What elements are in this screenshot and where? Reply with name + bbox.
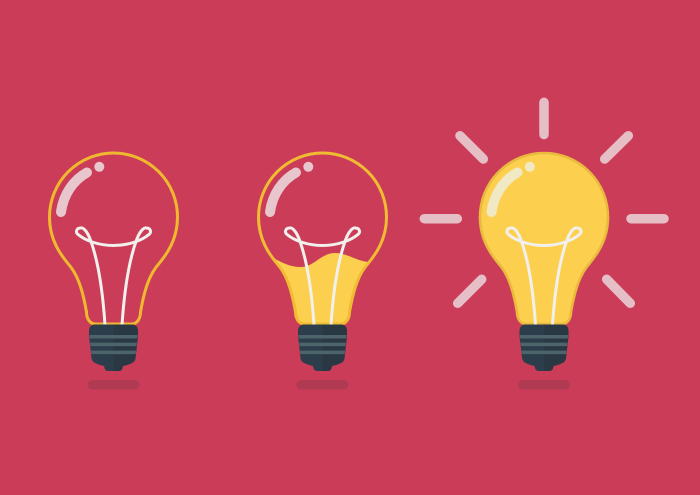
bulb 3 shadow <box>518 380 570 390</box>
bulb 3 glass <box>480 153 608 324</box>
light rays <box>424 102 664 303</box>
bulb 1 filament <box>76 228 150 325</box>
bulb 1 highlight <box>61 162 104 212</box>
bulb 3: fully lit <box>480 153 608 390</box>
bulb 2 glass outline <box>258 153 386 324</box>
bulb 3 socket <box>520 324 568 371</box>
bulb 2 highlight <box>270 162 313 212</box>
bulb 2 filament <box>286 228 360 325</box>
bulb 2 liquid fill <box>275 253 368 322</box>
bulb 2 shadow <box>296 380 348 390</box>
bulb 3 filament <box>507 228 581 325</box>
bulb 1 socket <box>89 324 138 371</box>
bulb 3 highlight <box>492 162 535 212</box>
bulb 1 shadow <box>88 380 140 390</box>
illustration: three light bulbs <box>48 98 669 390</box>
bulb 2: half filled <box>258 153 386 390</box>
bulb 1: empty <box>50 153 178 390</box>
bulb 1 glass outline <box>50 153 178 324</box>
bulb 2 socket <box>298 324 347 371</box>
